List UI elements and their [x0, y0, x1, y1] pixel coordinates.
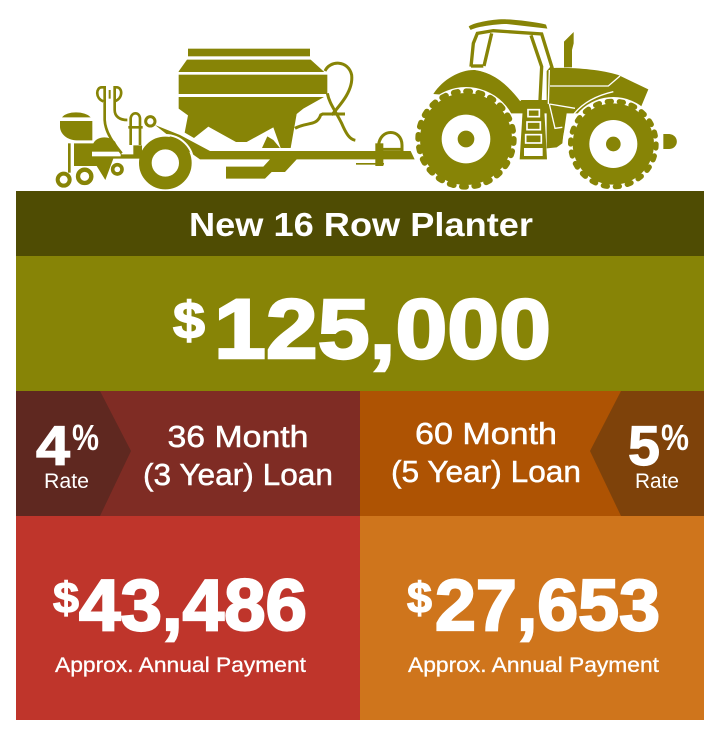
panel: 36 month loan — [16, 391, 360, 516]
small ring — [146, 117, 155, 126]
hood and body — [547, 68, 648, 148]
jack handle — [379, 132, 402, 151]
payment amount: $ — [407, 574, 432, 623]
front wheel — [566, 97, 660, 191]
payment amount: 27,653 — [435, 566, 660, 646]
planter row unit — [60, 112, 142, 180]
rate 4% — [36, 414, 99, 493]
loan term: 36 Month — [168, 419, 308, 454]
rate 4%: Rate — [44, 470, 89, 493]
loan term — [143, 419, 333, 492]
rate chevron — [590, 391, 704, 516]
rate 5% — [628, 414, 689, 493]
cab frame — [471, 31, 552, 101]
body lines — [472, 69, 620, 143]
planter linkage — [97, 87, 143, 153]
front weight — [663, 134, 677, 149]
hose — [295, 63, 355, 140]
rate 4%: % — [72, 417, 99, 458]
rate chevron — [16, 391, 131, 516]
rate 4%: 4 — [36, 414, 70, 477]
rate 5%: % — [661, 417, 689, 458]
loan term: (3 Year) Loan — [143, 457, 333, 492]
rear wheel — [414, 87, 518, 191]
loan term: (5 Year) Loan — [391, 454, 581, 489]
rear fender — [433, 70, 548, 113]
price band — [16, 256, 704, 391]
illustration: air seeder and planter — [58, 49, 415, 191]
planter wheels — [58, 165, 122, 186]
price: 125,000 — [214, 282, 551, 376]
rate 5%: Rate — [635, 470, 679, 493]
frame and hitch — [155, 125, 415, 179]
steps — [520, 105, 547, 159]
payment label: Approx. Annual Payment — [55, 654, 306, 677]
rate 5%: 5 — [628, 414, 660, 477]
dollar sign: $ — [173, 292, 205, 350]
title band — [16, 191, 704, 256]
panel: 60 month loan — [360, 391, 704, 516]
payment label: Approx. Annual Payment — [408, 654, 659, 677]
panel: 60 month payment — [360, 516, 704, 720]
transport wheel — [137, 135, 193, 191]
loan term: 60 Month — [415, 416, 557, 451]
loan term — [391, 416, 581, 489]
illustration: tractor — [414, 19, 677, 191]
payment amount: 43,486 — [79, 566, 307, 646]
exhaust — [564, 32, 574, 67]
title: New 16 Row Planter — [189, 206, 533, 243]
panel: 36 month payment — [16, 516, 360, 720]
cab roof — [469, 19, 547, 30]
payment amount: $ — [53, 574, 79, 623]
hopper — [179, 49, 327, 148]
